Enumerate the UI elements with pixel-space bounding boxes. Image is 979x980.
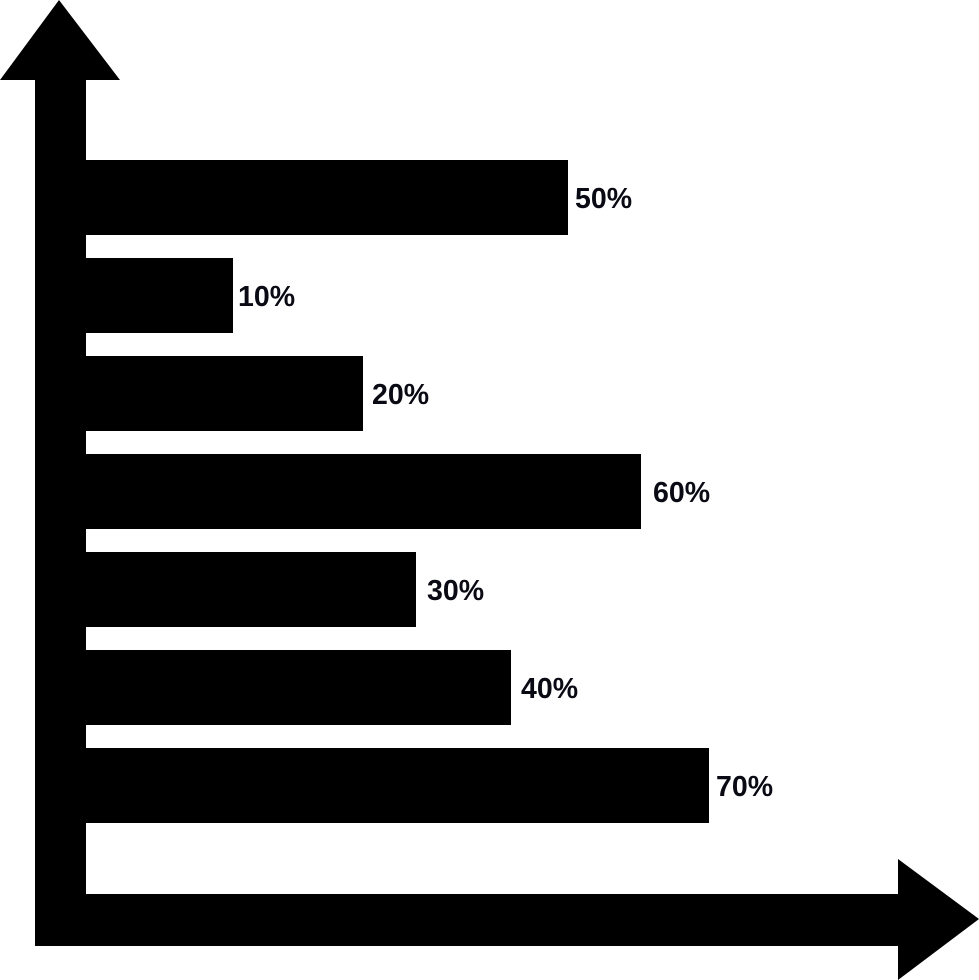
bar: 10%: 10% bbox=[238, 281, 295, 313]
horizontal axis arrow bbox=[35, 859, 979, 980]
vertical axis arrow bbox=[0, 0, 120, 946]
bar: 40%: 40% bbox=[521, 673, 578, 705]
bar: 70%: 70% bbox=[716, 771, 773, 803]
bar: 40% bbox=[86, 650, 578, 725]
bar: 30% bbox=[86, 552, 484, 627]
bar: 10% bbox=[86, 258, 295, 333]
bar: 50% bbox=[86, 160, 632, 235]
bar: 70% bbox=[86, 748, 773, 823]
bar: 20%: 20% bbox=[372, 379, 429, 411]
bar: 30%: 30% bbox=[427, 575, 484, 607]
bar: 60% bbox=[86, 454, 710, 529]
bar: 50%: 50% bbox=[575, 183, 632, 215]
bar: 20% bbox=[86, 356, 429, 431]
bar: 60%: 60% bbox=[653, 477, 710, 509]
